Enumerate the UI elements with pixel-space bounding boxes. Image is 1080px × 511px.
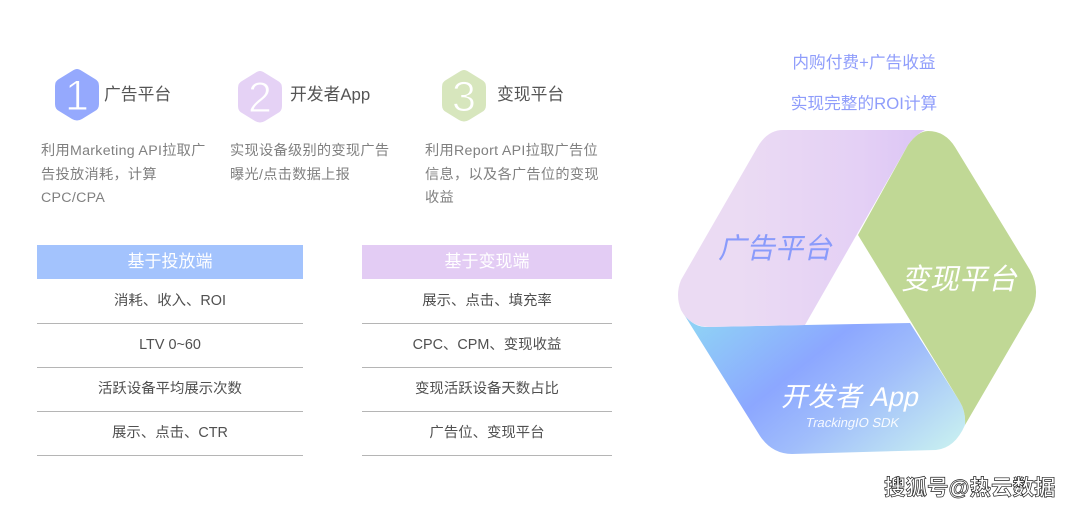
description 2: 实现设备级别的变现广告	[230, 143, 389, 159]
row	[362, 412, 612, 456]
row: CPC、CPM、变现收益	[413, 337, 561, 353]
row	[37, 324, 303, 368]
callout: in-app purchase plus ad revenue: 内购付费+广告收益	[792, 53, 936, 72]
row	[37, 368, 303, 412]
step 2: developer app	[230, 71, 389, 183]
heading: 开发者App: 开发者App	[290, 85, 370, 104]
row: 消耗、收入、ROI	[114, 293, 226, 309]
icon: hexagon 1	[55, 69, 99, 120]
segment: monetization platform (green)	[858, 131, 1036, 425]
row	[362, 279, 612, 324]
heading: 变现平台: 变现平台	[497, 85, 564, 104]
description 3	[425, 142, 599, 206]
icon: hexagon 2	[238, 71, 282, 122]
row: 活跃设备平均展示次数	[98, 381, 242, 397]
description 1	[41, 142, 206, 206]
segment: ad platform (purple)	[678, 130, 925, 327]
row	[362, 368, 612, 412]
row: 展示、点击、CTR	[112, 425, 228, 441]
row	[37, 412, 303, 456]
row	[37, 279, 303, 324]
description 1: CPC/CPA	[41, 190, 105, 206]
row: 变现活跃设备天数占比	[415, 381, 559, 397]
watermark: 搜狐号@热云数据	[884, 476, 1055, 500]
icon: hexagon 3	[442, 70, 486, 122]
step 1: ad platform	[41, 69, 206, 206]
row	[362, 324, 612, 368]
row: 广告位、变现平台	[429, 425, 545, 441]
label: TrackingIO SDK: TrackingIO SDK	[804, 415, 901, 430]
description 3: 信息，以及各广告位的变现	[425, 167, 599, 183]
description 1: 利用Marketing API拉取广	[41, 143, 206, 159]
label: 变现平台: 变现平台	[900, 263, 1022, 296]
heading: 广告平台: 广告平台	[104, 85, 171, 104]
table header: 基于变现端: 基于变现端	[444, 252, 530, 271]
row: 展示、点击、填充率	[422, 293, 552, 309]
label: 开发者 App: 开发者 App	[780, 381, 923, 412]
row: LTV 0~60	[139, 337, 201, 353]
description 1: 告投放消耗，计算	[41, 167, 157, 183]
description 2: 曝光/点击数据上报	[230, 167, 350, 183]
table header: 基于变现端	[362, 245, 612, 279]
icon: hexagon 2: 2	[248, 74, 272, 122]
icon: hexagon 3: 3	[452, 73, 476, 121]
callout: complete ROI: 实现完整的ROI计算	[791, 94, 937, 113]
label: 广告平台: 广告平台	[717, 233, 837, 265]
description 3: 利用Report API拉取广告位	[425, 143, 598, 159]
step 3: monetization platform	[425, 70, 599, 206]
segment: developer app (blue)	[680, 308, 965, 454]
description 2	[230, 142, 389, 183]
table header: 基于投放端: 基于投放端	[128, 252, 212, 271]
description 3: 收益	[425, 190, 454, 206]
table header: 基于投放端	[37, 245, 303, 279]
icon: hexagon 1: 1	[65, 72, 89, 120]
table: monetization metrics	[362, 245, 612, 456]
table: ad delivery metrics	[37, 245, 303, 456]
